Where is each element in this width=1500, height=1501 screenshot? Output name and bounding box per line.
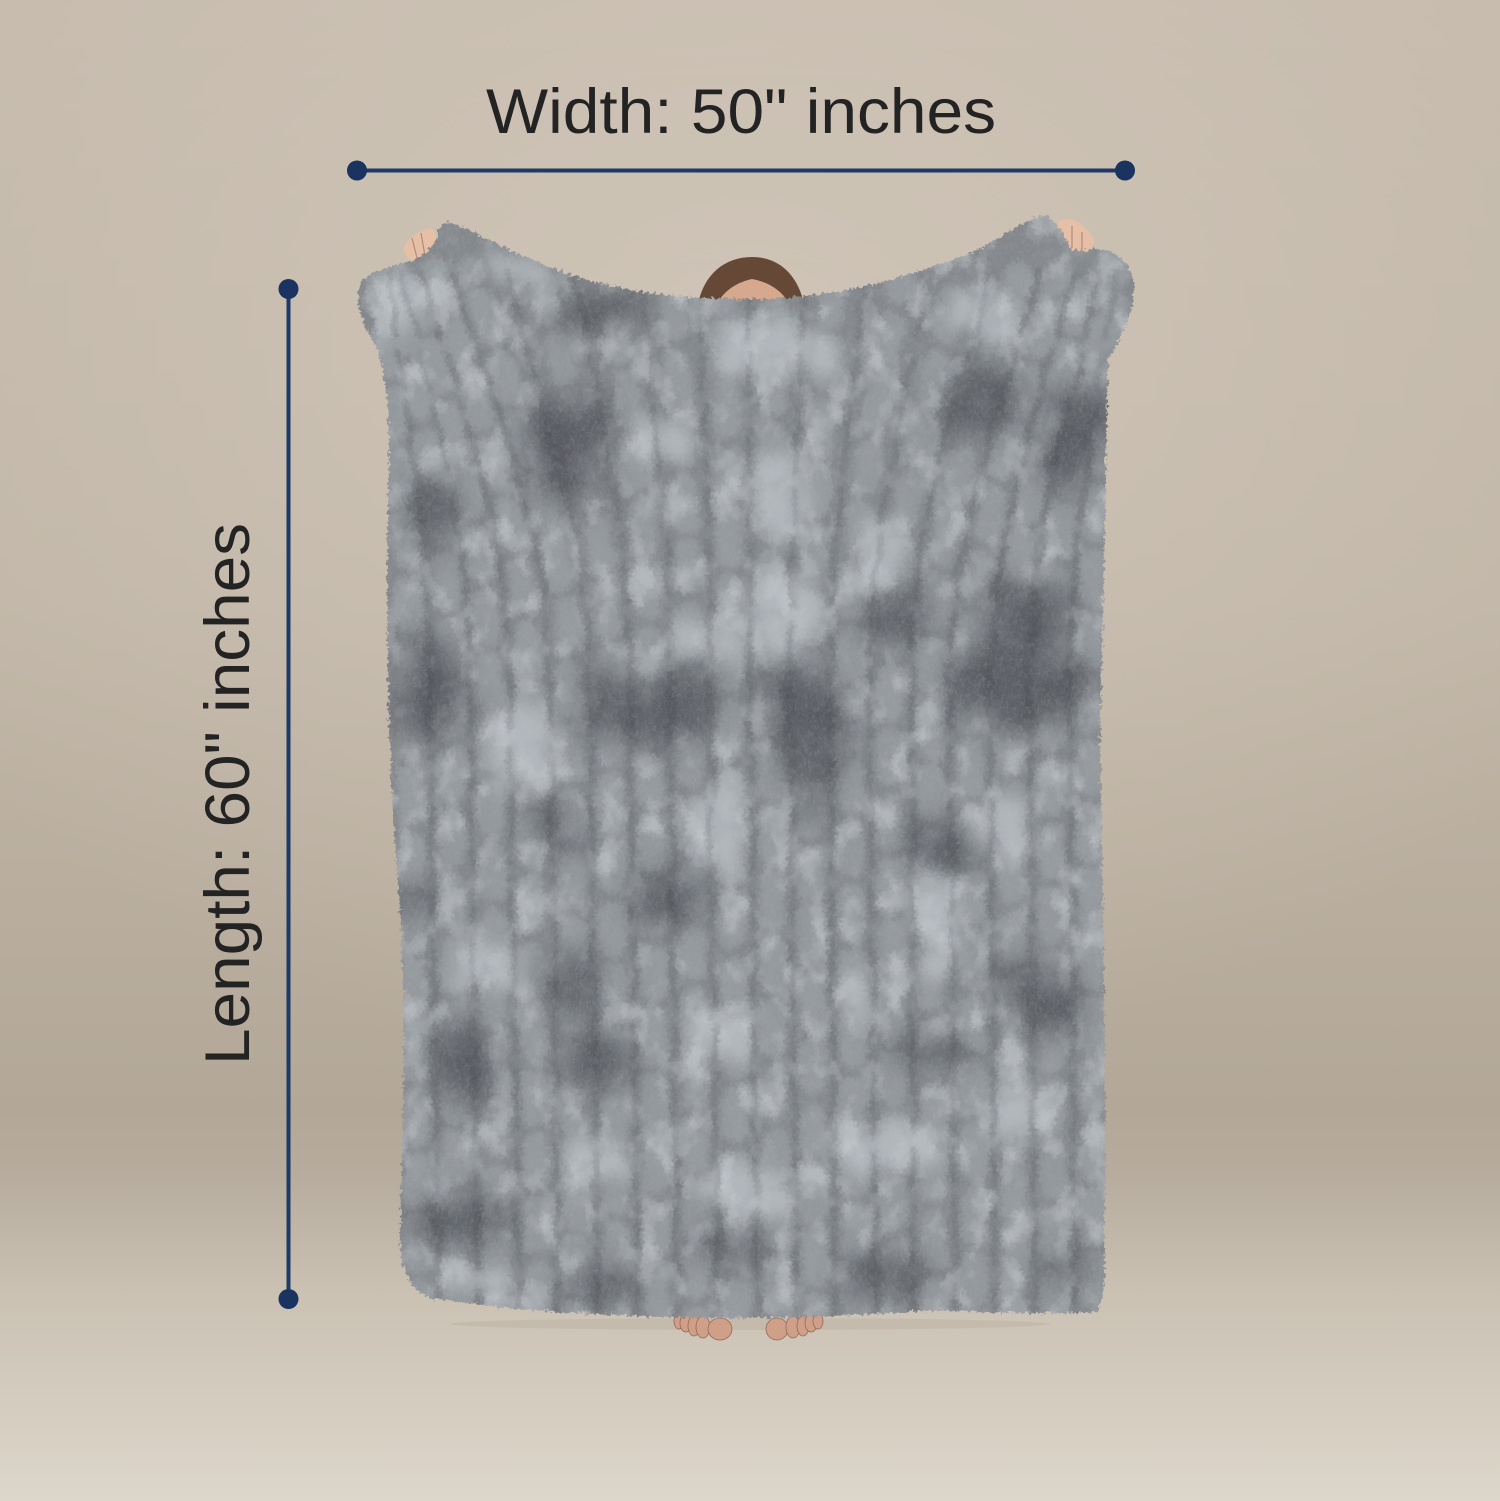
light dye patches — [380, 245, 1045, 1296]
heading: length label: Length: 60" inches — [193, 523, 263, 1065]
icon: bare feet below blanket — [450, 1313, 1050, 1340]
arrow: length dimension line — [278, 279, 298, 1309]
dark dye patches — [400, 285, 1105, 1302]
blanket: grey tie-dyed knitted fur throw — [340, 200, 1150, 1330]
arrow: width dimension line — [347, 160, 1135, 180]
person: hair and forehead behind the blanket — [698, 257, 804, 304]
icon: right hand gripping blanket — [1058, 219, 1094, 254]
heading: width label: Width: 50" inches — [486, 77, 996, 147]
knit column seams — [388, 270, 1115, 1320]
mottled dye: irregular dark and light clouds — [340, 200, 1150, 1330]
knit cells: rounded fur tufts following the columns — [380, 270, 1120, 1320]
fur texture — [340, 200, 1150, 1330]
icon: left hand gripping blanket — [404, 228, 436, 261]
